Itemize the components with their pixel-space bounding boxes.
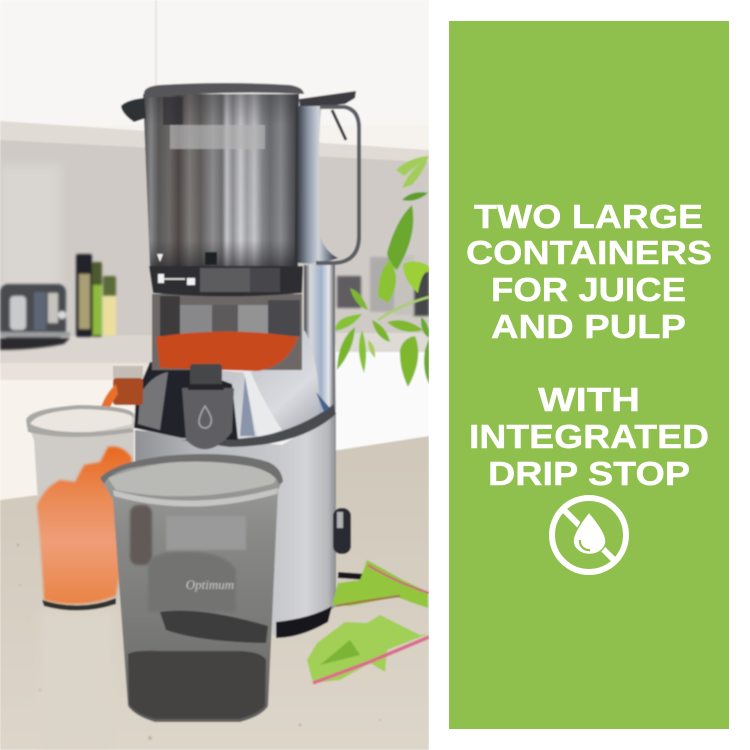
carrot pulp [37,446,132,604]
heading: integrated drip stop: DRIP STOP [488,456,690,493]
plant [335,155,429,387]
right counter and drawers [336,333,429,353]
handle [295,91,359,263]
hopper lid [144,83,304,98]
juicer base [134,265,367,638]
backsplash wall [0,138,429,345]
worktop reflection [39,638,110,750]
heading: two large containers: AND PULP [491,309,686,346]
panel: green callout [449,21,729,729]
beet greens [307,560,429,683]
heading: integrated drip stop: INTEGRATED [469,419,709,456]
front juice container: Optimum [186,577,234,592]
cabinet ledge [0,121,429,162]
heading: two large containers: FOR JUICE [491,272,686,309]
juice collector section [152,294,302,371]
heading: two large containers: TWO LARGE [474,199,703,236]
stone worktop [0,436,429,750]
icon: no drip [552,498,626,572]
heading: two large containers [466,199,712,346]
front juice container [100,454,283,722]
toaster [0,284,70,350]
heading: integrated drip stop [469,382,709,493]
black spout housing [134,362,238,440]
carrot pulp container [26,405,134,611]
hopper lug [121,98,146,122]
dial [333,508,351,554]
chrome motor housing [150,326,337,440]
heading: integrated drip stop: WITH [538,382,640,419]
lock band with icons [149,266,303,296]
background appliances [337,255,429,316]
spout with drip stop [100,364,234,449]
left counter and drawers [0,336,153,364]
bottles [76,254,116,337]
photo: juicer on kitchen counter [0,0,429,750]
heading: two large containers: CONTAINERS [466,235,712,272]
hopper [121,83,304,266]
